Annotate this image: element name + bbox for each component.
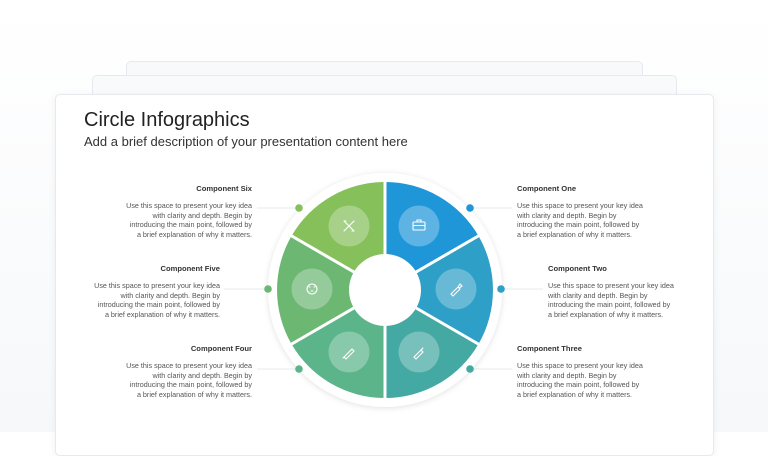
text: component three [517, 344, 643, 399]
subtitle: Add a brief description of your presentation content here [84, 134, 408, 149]
text: component four [126, 344, 252, 399]
text: component four: Use this space to present your key idea [126, 361, 252, 370]
segment five [277, 236, 385, 344]
text: component five [94, 264, 220, 319]
text: component six: Component Six [196, 184, 252, 193]
text: component six: with clarity and depth. Begin by [152, 211, 252, 220]
text: component five: Component Five [160, 264, 220, 273]
text: component five: Use this space to present your key idea [94, 281, 220, 290]
text: component two: Use this space to present your key idea [548, 281, 674, 290]
text: component four: introducing the main point, followed by [130, 380, 252, 389]
back card 2 [126, 61, 643, 123]
text: component two: a brief explanation of why it matters. [548, 310, 663, 319]
text: component four: a brief explanation of why it matters. [137, 390, 252, 399]
main card [55, 94, 714, 456]
text: component two: introducing the main point, followed by [548, 300, 670, 309]
segment four [292, 290, 385, 398]
text: component four: Component Four [191, 344, 252, 353]
segment six [292, 182, 385, 290]
text: component six [126, 184, 252, 239]
back card 1 [92, 75, 677, 137]
text: component three: with clarity and depth. Begin by [517, 371, 616, 380]
title: Circle Infographics [84, 109, 250, 131]
text: component two [548, 264, 674, 319]
text: component one: introducing the main point, followed by [517, 220, 639, 229]
text: component three: Component Three [517, 344, 582, 353]
text: component three: Use this space to present your key idea [517, 361, 643, 370]
icon circles [292, 206, 476, 372]
text: component four: with clarity and depth. Begin by [152, 371, 252, 380]
text: component one: Use this space to present your key idea [517, 201, 643, 210]
text: component six: introducing the main point, followed by [130, 220, 252, 229]
text: component six: a brief explanation of why it matters. [137, 230, 252, 239]
text: component six: Use this space to present your key idea [126, 201, 252, 210]
text: component five: introducing the main point, followed by [98, 300, 220, 309]
text: component three: a brief explanation of why it matters. [517, 390, 632, 399]
icons [307, 220, 462, 359]
text: component five: with clarity and depth. Begin by [120, 291, 220, 300]
segment one [385, 182, 478, 290]
text: component three: introducing the main point, followed by [517, 380, 639, 389]
segment three [385, 290, 478, 398]
text: component one [517, 184, 643, 239]
text: component two: with clarity and depth. Begin by [548, 291, 648, 300]
dots [295, 204, 303, 212]
text: component one: a brief explanation of why it matters. [517, 230, 632, 239]
text: component five: a brief explanation of why it matters. [105, 310, 220, 319]
text: component two: Component Two [548, 264, 607, 273]
text: component one: Component One [517, 184, 576, 193]
segment two [385, 236, 493, 344]
text: component one: with clarity and depth. Begin by [517, 211, 616, 220]
